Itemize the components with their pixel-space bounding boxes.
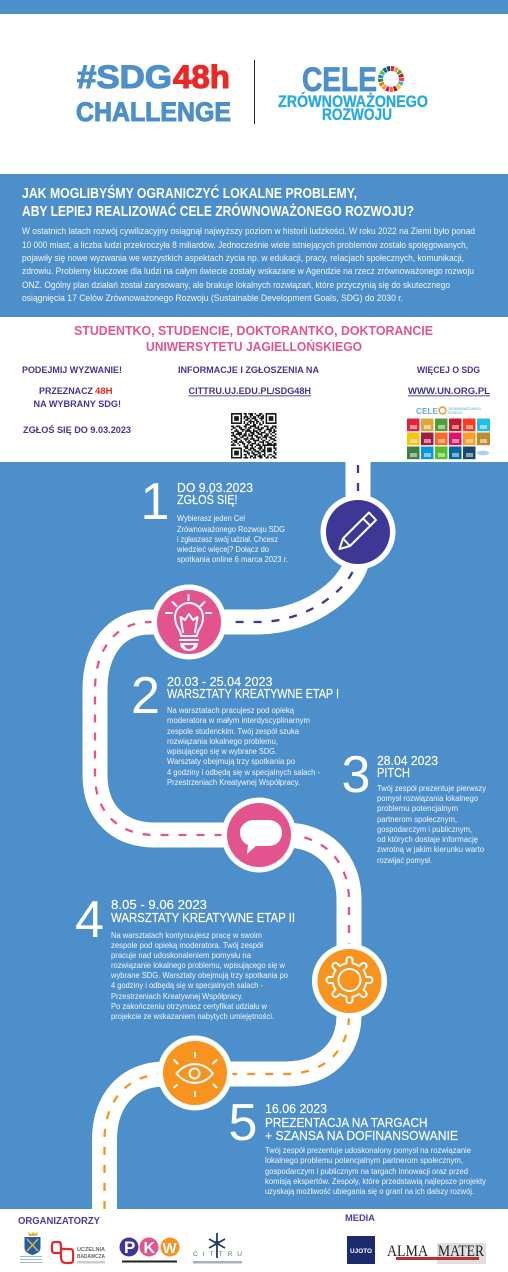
step 5: uzyskają możliwość ubiegania się o grant na ich dalszy rozwój. xyxy=(265,1187,474,1196)
step 1: Zrównoważonego Rozwoju SDG xyxy=(177,525,285,534)
step 4: WARSZTATY KREATYWNE ETAP II xyxy=(111,911,295,925)
step 2: Przestrzeniach Kreatywnej Współpracy. xyxy=(167,778,300,787)
intro heading: JAK MOGLIBYŚMY OGRANICZYĆ LOKALNE PROBLEMY, xyxy=(22,184,357,202)
step 4: 4 godziny i odbędą się w specjalnych salach - xyxy=(111,981,263,990)
step 3: od których dostaje informację xyxy=(377,835,479,844)
title: #SDG48h Challenge: CHALLENGE xyxy=(76,97,231,127)
logo: Uczelnia Badawcza: UCZELNIA xyxy=(77,1247,105,1253)
logo: Cele Zrównoważonego Rozwoju: ZRÓWNOWAŻONEGO xyxy=(278,92,428,111)
step 5: lokalnego problemu potencjalnym partnerom społecznym, xyxy=(265,1156,463,1165)
step 4: wybrane SDG. Warsztaty obejmują trzy spotkania po xyxy=(110,971,289,980)
logo: PKW: W xyxy=(162,1240,178,1257)
step 2: Na warsztatach pracujesz pod opieką xyxy=(167,706,295,715)
title: #SDG48h Challenge: 48h xyxy=(173,59,230,95)
column: take the challenge xyxy=(22,365,131,435)
column: information and registration: INFORMACJE I ZGŁOSZENIA NA xyxy=(178,365,319,375)
intro text: osiągnięcia 17 Celów Zrównoważonego Rozwoju (Sustainable Development Goals, SDG) do 2030 r. xyxy=(22,292,403,303)
heading: media: MEDIA xyxy=(345,1213,375,1224)
step 3 xyxy=(342,746,486,865)
column: information and registration: CITTRU.UJ.EDU.PL/SDG48H xyxy=(188,386,311,396)
column: take the challenge: NA WYBRANY SDG! xyxy=(34,399,121,409)
step 3: 28.04 2023 xyxy=(377,754,438,768)
step 2: 2 xyxy=(131,667,160,725)
step 4: 4 xyxy=(75,891,104,949)
logo: PKW: K xyxy=(144,1240,156,1257)
call to students: UNIWERSYTETU JAGIELLOŃSKIEGO xyxy=(146,339,362,354)
logo: Cele Zrównoważonego Rozwoju: CELE xyxy=(302,61,377,99)
logo: Alma Mater: MATER xyxy=(438,1243,484,1260)
column: take the challenge: PODEJMIJ WYZWANIE! xyxy=(22,365,122,375)
step 2: 20.03 - 25.04 2023 xyxy=(167,675,273,689)
icon: light bulb xyxy=(152,584,226,660)
icon: eye xyxy=(158,1036,232,1110)
step 3: problemu potencjalnym xyxy=(377,804,458,813)
column: information and registration xyxy=(178,365,319,396)
icon: speech bubble xyxy=(222,798,296,872)
step 1: wiedzieć więcej? Dołącz do xyxy=(176,545,270,554)
intro text: pojawiły się nowe wyzwania we wszystkich aspektach życia np. w edukacji, pracy, relacjach społecznych, komunikacji, xyxy=(22,252,464,263)
step 5: 16.06 2023 xyxy=(265,1102,327,1116)
step 1: Wybierasz jeden Cel xyxy=(177,514,245,523)
step 5: PREZENTACJA NA TARGACH xyxy=(265,1116,428,1130)
step 1: DO 9.03.2023 xyxy=(177,481,253,495)
step 5 xyxy=(229,1094,486,1196)
step 3: zwrotną w jakim kierunku warto xyxy=(377,845,485,854)
column: take the challenge: 48H xyxy=(95,386,112,396)
logo: UJOT: UJOTO xyxy=(350,1248,372,1255)
icon: pencil xyxy=(320,494,396,570)
step 4: projekcie ze wskazaniem nabytych umiejętności. xyxy=(111,1012,274,1021)
step 1: ZGŁOŚ SIĘ! xyxy=(177,492,238,507)
step 5: komisją ekspertów. Zespoły, które przedstawią najlepsze projekty xyxy=(265,1177,486,1186)
step 3: PITCH xyxy=(377,766,410,780)
step 4: Po zakończeniu otrzymasz certyfikat udziału w xyxy=(111,1002,267,1011)
heading: organizers: ORGANIZATORZY xyxy=(18,1216,100,1227)
step 4: zespole pod opieką moderatora. Twój zespół xyxy=(111,941,263,950)
SDG tiles poster: ZRÓWNOWAŻONEGO xyxy=(448,406,481,411)
logo: CITTRU: CITTRU xyxy=(193,1251,242,1258)
step 3: Twój zespół prezentuje pierwszy xyxy=(377,784,486,793)
step 2: WARSZTATY KREATYWNE ETAP I xyxy=(167,687,339,701)
SDG tiles poster xyxy=(407,406,490,459)
logo: PKW xyxy=(120,1238,180,1262)
call to students: STUDENTKO, STUDENCIE, DOKTORANTKO, DOKTORANCIE xyxy=(74,323,433,338)
step 5: + SZANSA NA DOFINANSOWANIE xyxy=(265,1129,458,1143)
panel: introduction xyxy=(0,174,508,317)
step 4: Przestrzeniach Kreatywnej Współpracy. xyxy=(111,992,243,1001)
title: #SDG48h Challenge: #SDG xyxy=(77,59,172,95)
logo: Alma Mater xyxy=(387,1243,486,1264)
step 1: i zgłaszasz swój udział. Chcesz xyxy=(177,535,278,544)
intro heading xyxy=(22,184,414,220)
column: take the challenge: ZGŁOŚ SIĘ DO 9.03.2023 xyxy=(23,424,131,435)
intro text: ONZ. Ogólny plan działań został zarysowany, ale brakuje lokalnych rozwiązań, które przyczynią się do skutecznego xyxy=(22,279,450,290)
step 1: spotkania online 6 marca 2023 r. xyxy=(177,555,288,564)
step 2: 4 godziny i odbędą się w specjalnych salach - xyxy=(167,768,320,777)
step 3: pomysł rozwiązania lokalnego xyxy=(377,794,479,803)
step 2: rozwiązania lokalnego problemu, xyxy=(167,737,278,746)
step 2: moderatora w małym interdyscyplinarnym xyxy=(167,716,310,725)
step 4: 8.05 - 9.06 2023 xyxy=(111,898,207,912)
step 2: wpisującego się w wybrane SDG. xyxy=(166,747,277,756)
step 4: pracuje nad udoskonaleniem pomysłu na xyxy=(111,951,252,960)
step 3: 3 xyxy=(342,746,370,804)
logo: Alma Mater: ALMA xyxy=(387,1243,428,1260)
column: more about SDG: WWW.UN.ORG.PL xyxy=(408,386,491,396)
SDG tiles poster: ROZWOJU xyxy=(448,411,462,415)
step 2 xyxy=(131,667,339,787)
logo: Uczelnia Badawcza: BADAWCZA xyxy=(77,1254,105,1260)
logo: Cele Zrównoważonego Rozwoju: ROZWOJU xyxy=(322,105,392,124)
title: #SDG48h Challenge xyxy=(76,59,231,127)
step 3: rozwijać pomysł. xyxy=(377,856,432,865)
column: more about SDG: WIĘCEJ O SDG xyxy=(417,365,480,375)
column: take the challenge: PRZEZNACZ xyxy=(39,386,93,396)
step 1 xyxy=(141,473,288,564)
intro text xyxy=(22,225,475,303)
step 4: Na warsztatach kontynuujesz pracę w swoim xyxy=(111,931,262,940)
logo: CITTRU xyxy=(193,1233,242,1264)
logo: Jagiellonian coat of arms xyxy=(20,1232,42,1263)
logo: Cele Zrównoważonego Rozwoju xyxy=(278,61,428,124)
column: more about SDG xyxy=(408,365,491,396)
logo: PKW: P xyxy=(124,1238,135,1257)
QR code xyxy=(231,413,277,459)
step 2: zespole studenckim. Twój zespół szuka xyxy=(167,727,300,736)
icon: gear xyxy=(312,944,387,1018)
step 5: gospodarczym i publicznym na targach innowacji oraz przed xyxy=(265,1167,468,1176)
logo: UJOT xyxy=(347,1236,375,1264)
step 2: Warsztaty obejmują trzy spotkania po xyxy=(167,757,296,766)
step 3: partnerom społecznym, xyxy=(377,815,457,824)
step 4: rozwiązanie lokalnego problemu, wpisującego się w xyxy=(111,961,285,970)
panel: timeline xyxy=(0,455,508,1212)
step 3: gospodarczym i publicznym, xyxy=(377,825,472,834)
logo: Uczelnia Badawcza xyxy=(52,1242,105,1264)
step 5: 5 xyxy=(229,1094,257,1152)
intro heading: ABY LEPIEJ REALIZOWAĆ CELE ZRÓWNOWAŻONEGO ROZWOJU? xyxy=(22,202,414,220)
SDG tiles poster: CELE xyxy=(416,406,438,416)
call to students xyxy=(74,323,433,354)
header logos xyxy=(76,59,428,127)
winding road xyxy=(95,455,358,1212)
step 1: 1 xyxy=(141,473,169,531)
step 4 xyxy=(75,891,295,1021)
step 5: Twój zespół prezentuje udoskonalony pomysł na rozwiązanie xyxy=(265,1146,472,1155)
